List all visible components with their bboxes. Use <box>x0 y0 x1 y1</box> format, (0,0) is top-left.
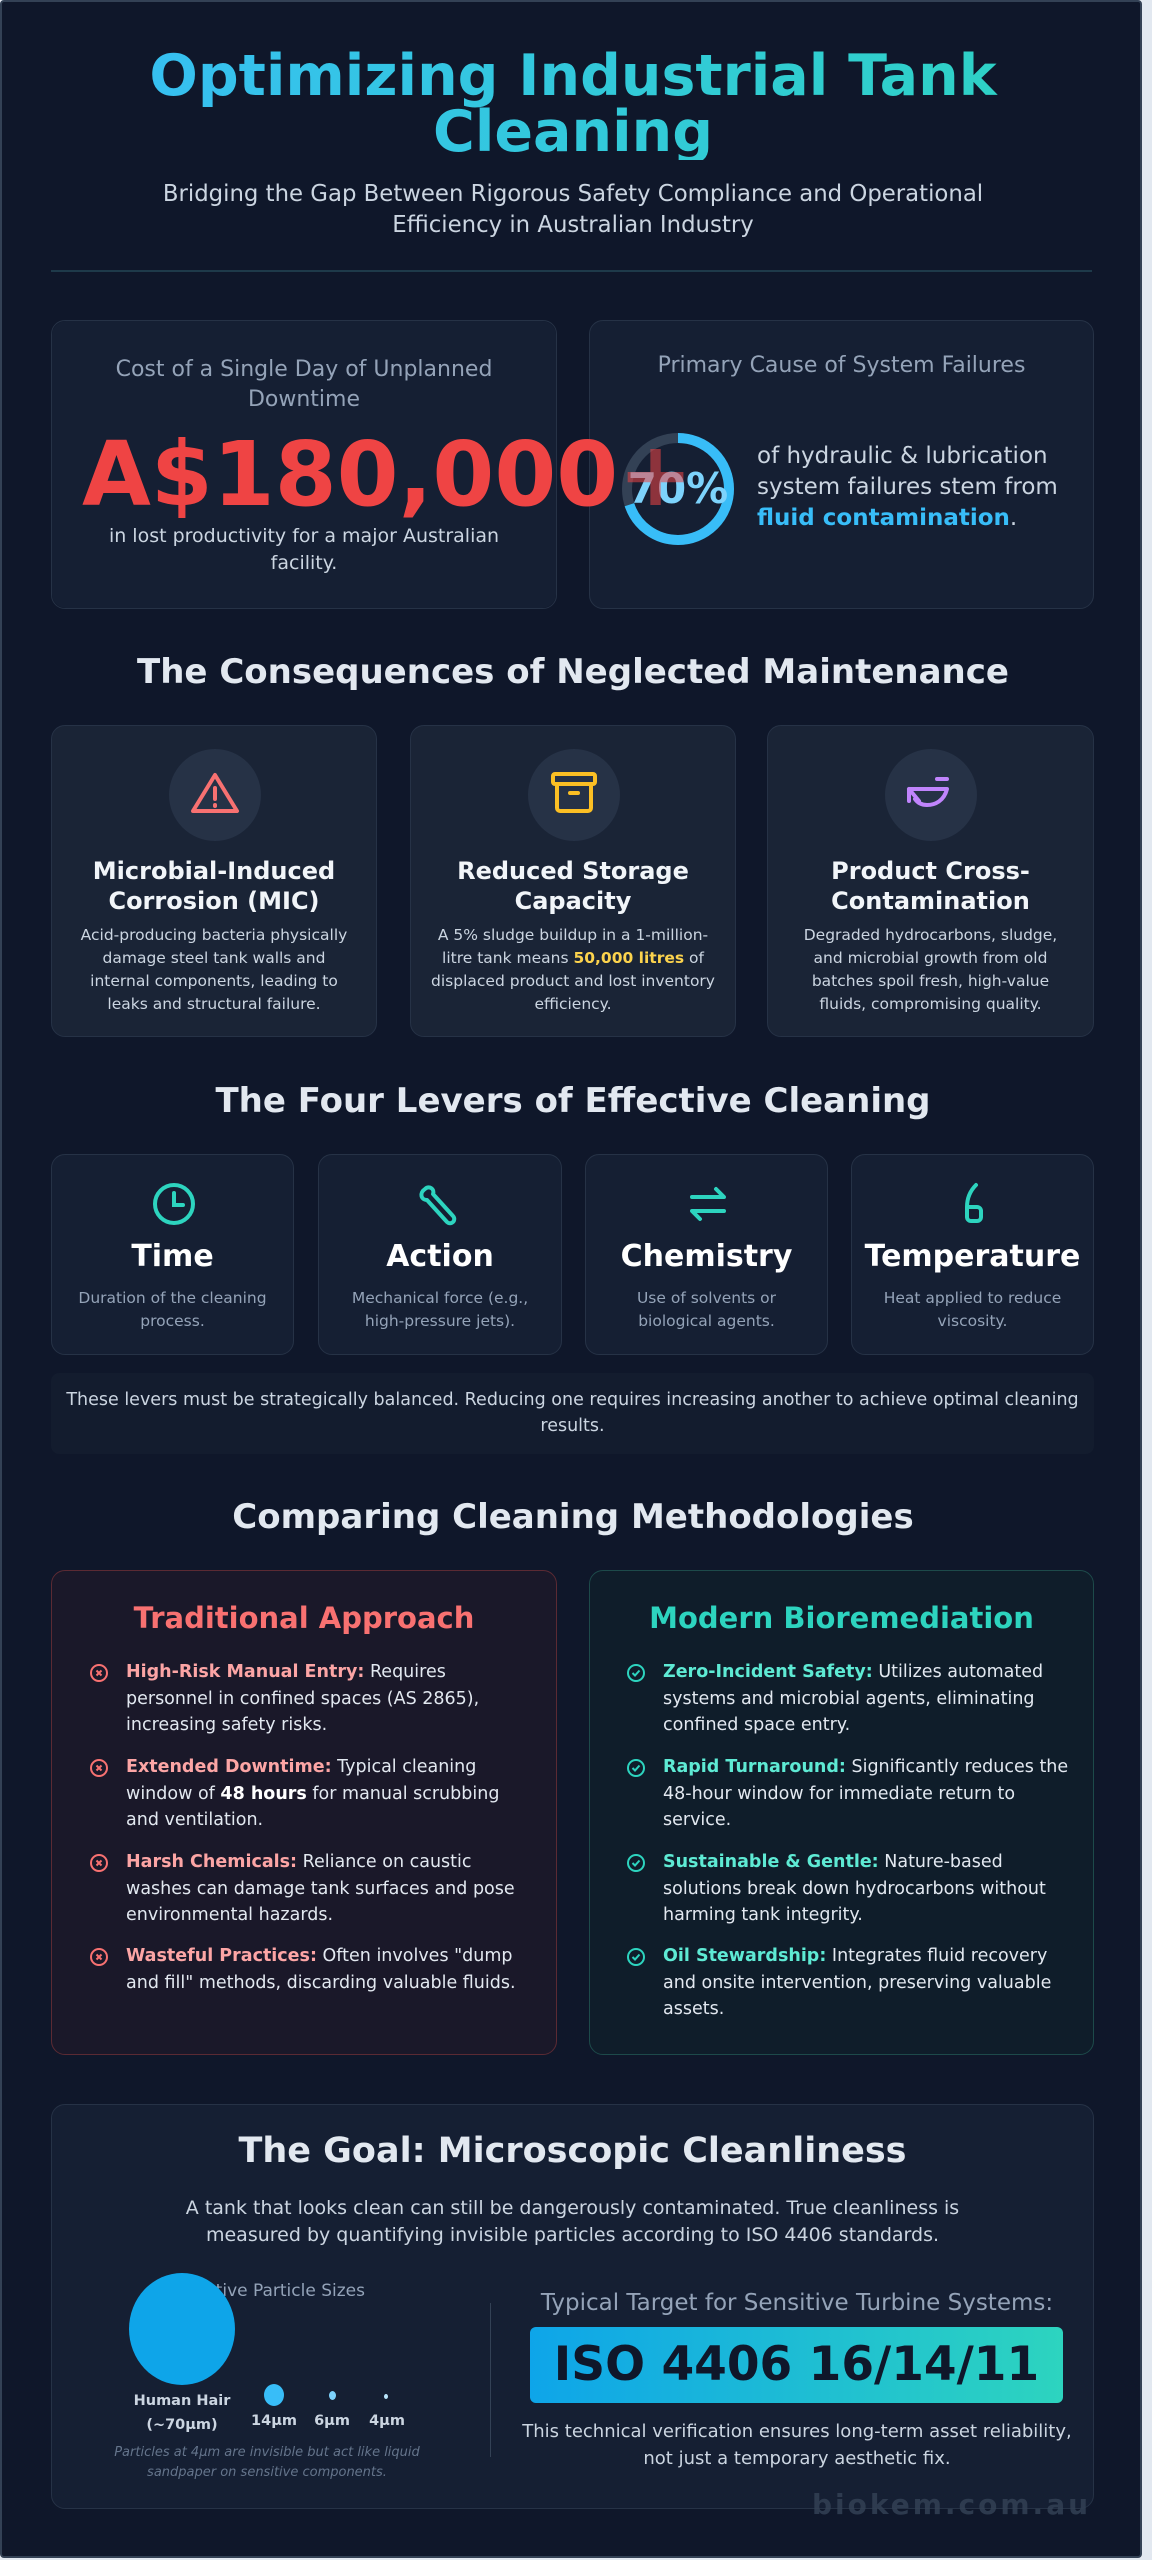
particle size chart: 4µm <box>369 2413 405 2429</box>
item: High-Risk Manual Entry: Requires personnel in confined spaces (AS 2865), increasing safety risks. <box>126 1662 479 1735</box>
watermark: biokem.com.au <box>812 2488 1091 2521</box>
stat label: Primary Cause of System Failures <box>658 353 1025 378</box>
big number: A$180,000+ <box>82 422 693 526</box>
panel: modern <box>589 1570 1094 2055</box>
item: Zero-Incident Safety: Utilizes automated systems and microbial agents, eliminating confined space entry. <box>663 1662 1043 1735</box>
title: Optimizing Industrial Tank <box>149 43 997 109</box>
panel title: Modern Bioremediation <box>649 1601 1034 1635</box>
labels <box>134 2393 230 2433</box>
item: Rapid Turnaround: Significantly reduces the 48-hour window for immediate return to service. <box>663 1757 1068 1830</box>
subtitle: Bridging the Gap Between Rigorous Safety Compliance and Operational <box>163 181 983 207</box>
target block <box>522 2290 1072 2469</box>
card: storage <box>410 725 736 1037</box>
heading: comparing: Comparing Cleaning Methodologies <box>232 1497 914 1537</box>
title <box>93 857 335 915</box>
title: Chemistry <box>621 1239 792 1274</box>
circle: 14um <box>264 2384 284 2406</box>
title: Capacity <box>515 887 631 915</box>
card: MIC <box>51 725 377 1037</box>
ISO badge <box>530 2327 1063 2403</box>
title: Temperature <box>865 1239 1080 1274</box>
title: Microbial-Induced <box>93 857 335 885</box>
title: Product Cross- <box>831 857 1030 885</box>
desc: Use of solvents or biological agents. <box>637 1289 776 1330</box>
title: Contamination <box>831 887 1030 915</box>
stat card: downtime cost <box>51 320 557 609</box>
icon: fluid <box>885 749 977 841</box>
desc: Mechanical force (e.g., high-pressure jets). <box>352 1289 528 1330</box>
desc: Degraded hydrocarbons, sludge, and microbial growth from old batches spoil fresh, high-value fluids, compromising quality. <box>804 926 1057 1013</box>
particle size chart: 14µm <box>251 2413 297 2429</box>
item: Oil Stewardship: Integrates fluid recovery and onsite intervention, preserving valuable assets. <box>663 1946 1051 2019</box>
labels: (~70µm) <box>146 2417 218 2433</box>
panel: goal <box>51 2104 1094 2509</box>
icon: flame <box>965 1182 983 1223</box>
lever: temperature <box>851 1154 1094 1355</box>
donut chart 70% <box>622 433 734 545</box>
circle: hair <box>129 2273 235 2385</box>
chart label: Relative Particle Sizes <box>179 2281 365 2301</box>
lever: action <box>318 1154 562 1355</box>
panel: traditional <box>51 1570 557 2055</box>
desc: A 5% sludge buildup in a 1-million-litre tank means 50,000 litres of displaced product and lost inventory efficiency. <box>431 926 715 1013</box>
failure text: of hydraulic & lubrication system failures stem from fluid contamination. <box>757 443 1058 531</box>
lever: time <box>51 1154 294 1355</box>
title: Reduced Storage <box>457 857 689 885</box>
title: Action <box>386 1239 494 1274</box>
desc: Duration of the cleaning process. <box>78 1289 267 1330</box>
particle size chart <box>114 2273 420 2480</box>
title <box>2 48 1144 160</box>
circle: 4um <box>384 2394 388 2399</box>
labels: Human Hair <box>134 2393 230 2409</box>
icon: clock <box>153 1183 195 1225</box>
stat description: in lost productivity for a major Australian facility. <box>109 525 499 574</box>
subtitle: Efficiency in Australian Industry <box>392 212 754 238</box>
stat card: failures <box>589 320 1094 609</box>
heading: four levers: The Four Levers of Effective Cleaning <box>215 1081 931 1121</box>
title: Corrosion (MIC) <box>108 887 320 915</box>
heading: consequences: The Consequences of Neglected Maintenance <box>137 652 1009 692</box>
icon: wrench <box>419 1185 456 1226</box>
heading: The Goal: Microscopic Cleanliness <box>238 2131 907 2171</box>
title: Cleaning <box>433 99 713 165</box>
title: Time <box>131 1239 214 1274</box>
balance note: These levers must be strategically balanced. Reducing one requires increasing another to achieve optimal cleaning results. <box>66 1390 1079 1436</box>
item: Wasteful Practices: Often involves "dump and fill" methods, discarding valuable fluids. <box>126 1946 516 1992</box>
desc: Acid-producing bacteria physically damage steel tank walls and internal components, leading to leaks and structural failure. <box>81 926 347 1013</box>
particle size chart: 6µm <box>314 2413 350 2429</box>
donut chart 70%: 70% <box>628 464 728 513</box>
balance note <box>51 1373 1094 1454</box>
desc: Heat applied to reduce viscosity. <box>884 1289 1061 1330</box>
title <box>457 857 689 915</box>
icon: box <box>528 749 620 841</box>
ISO badge: ISO 4406 16/14/11 <box>554 2337 1039 2392</box>
stat label: Cost of a Single Day of Unplanned Downtime <box>116 357 492 412</box>
subtitle <box>163 181 983 238</box>
item: Sustainable & Gentle: Nature-based solutions break down hydrocarbons without harming tank integrity. <box>663 1852 1046 1925</box>
intro text: A tank that looks clean can still be dangerously contaminated. True cleanliness is measured by quantifying invisible particles according to ISO 4406 standards. <box>186 2197 959 2246</box>
circle: 6um <box>329 2391 336 2400</box>
icon: warning <box>169 749 261 841</box>
lever: chemistry <box>585 1154 828 1355</box>
item: Harsh Chemicals: Reliance on caustic washes can damage tank surfaces and pose environmental hazards. <box>126 1852 515 1925</box>
caption: Particles at 4µm are invisible but act like liquid sandpaper on sensitive components. <box>114 2445 420 2480</box>
verification note: This technical verification ensures long-term asset reliability, not just a temporary aesthetic fix. <box>522 2421 1072 2469</box>
title <box>831 857 1030 915</box>
target label: Typical Target for Sensitive Turbine Systems: <box>541 2290 1053 2316</box>
panel title: Traditional Approach <box>134 1601 474 1635</box>
card: cross-contamination <box>767 725 1094 1037</box>
icon: arrows <box>690 1186 726 1222</box>
item: Extended Downtime: Typical cleaning window of 48 hours for manual scrubbing and ventilation. <box>126 1757 499 1830</box>
